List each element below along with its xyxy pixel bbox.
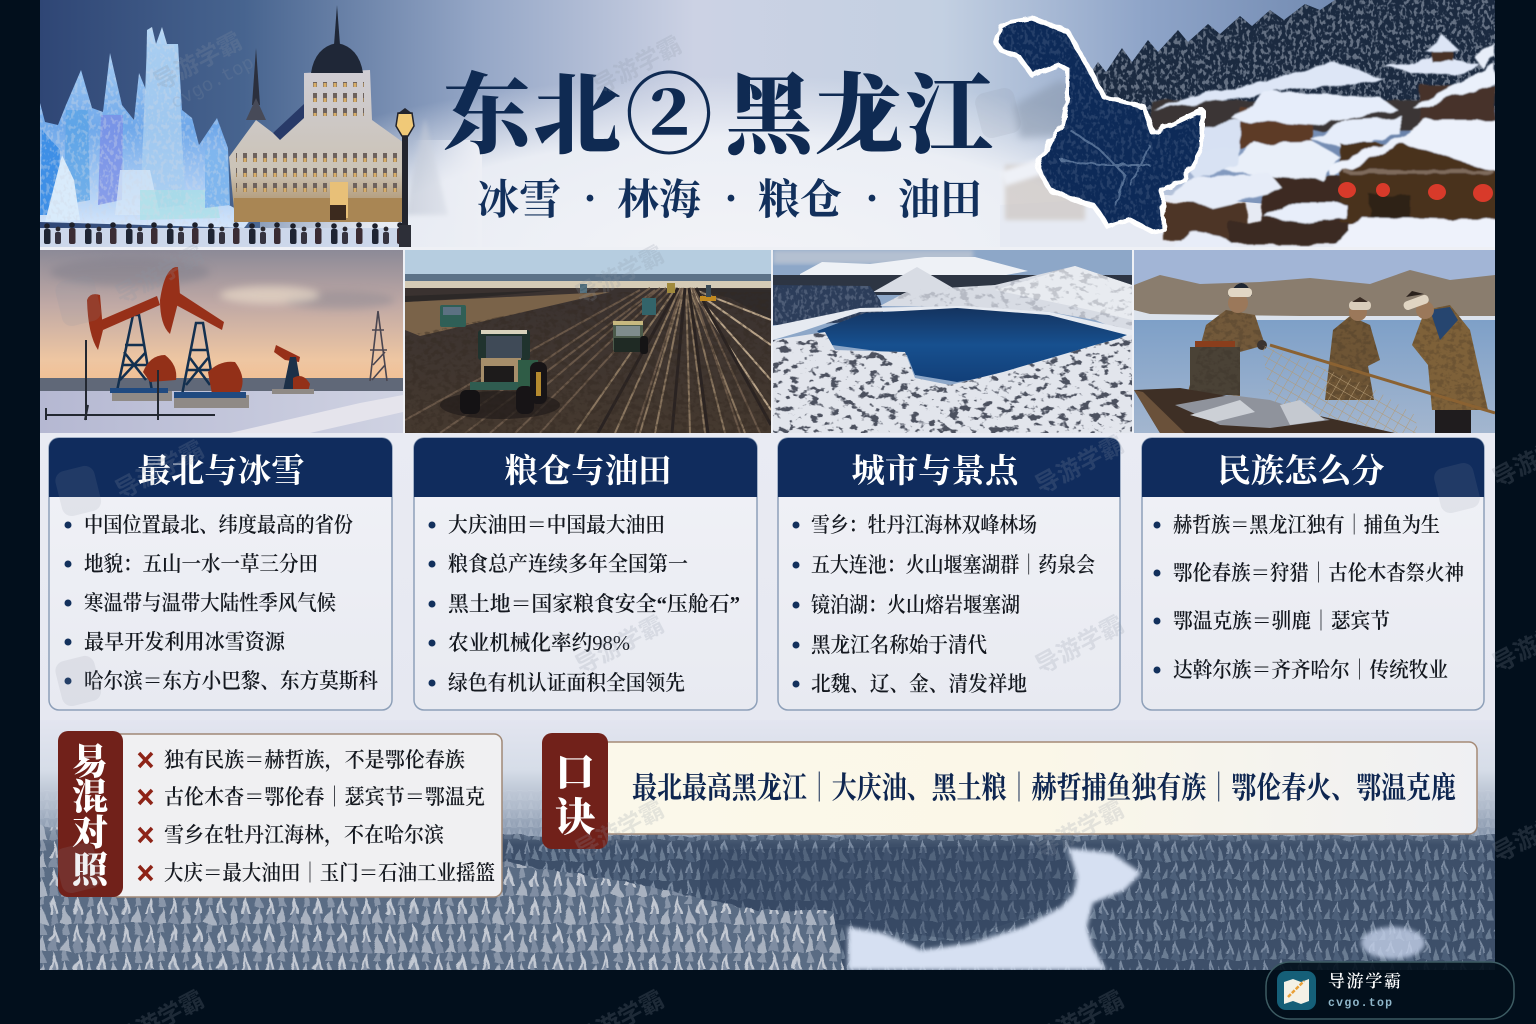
card header [778,438,1120,497]
bullet list [792,513,1095,696]
bullet list: 黑土地＝国家粮食安全“压舱石” [448,592,740,616]
card: 最北与冰雪 [49,438,392,710]
net pole [1270,345,1495,413]
subtitle: · [724,176,738,222]
bottom forest scene [30,720,1510,985]
boat with fish [1134,388,1395,433]
photo: crater lake with snow [773,250,1132,433]
tab: 易混对照 [58,731,123,897]
scene: faded bare tree [408,123,446,216]
bullet list [64,513,378,693]
cross icons [139,753,152,880]
bullet list: 粮食总产连续多年全国第一 [448,552,688,576]
foreground frosted forest [40,824,844,970]
bullet list: 绿色有机认证面积全国领先 [448,671,685,695]
watermarks: 导游学霸 [1031,796,1129,865]
icons: red lanterns [1338,182,1493,202]
frozen river [848,848,1141,970]
bullet list: 北魏、辽、金、清发祥地 [811,672,1027,696]
watermarks: 导游学霸 [589,32,686,101]
photo: Hezhe fishers on river [1134,250,1495,433]
watermarks: 导游学霸 [571,611,669,680]
bullet list: 雪乡：牡丹江海林双峰林场 [811,513,1037,537]
title: 东 [443,69,539,166]
confusion list: 独有民族＝赫哲族，不是鄂伦春族 [164,748,465,773]
subtitle: 油田 [898,177,982,224]
tab: 口诀: 口 [555,750,595,795]
fisher three [1402,291,1488,433]
watermarks: 导游学霸 [111,436,209,505]
watermarks: 导游学霸 [571,796,669,865]
bullet list: 鄂伦春族＝狩猎｜古伦木杳祭火神 [1173,561,1464,585]
subtitle: · [583,176,597,222]
subtitle: · [865,176,879,222]
bullet list [1154,513,1464,682]
bullet list [428,513,740,695]
brand badge: 导游学霸 [1328,972,1401,991]
watermarks: 导游学霸 [149,28,247,97]
bullet list: 黑龙江名称始于清代 [811,633,987,657]
bullet list: 中国位置最北、纬度最高的省份 [84,513,353,537]
card: 民族怎么分: 民族怎么分 [1218,453,1384,490]
tab: 口诀 [542,733,608,849]
tab: 口诀: 诀 [555,795,595,840]
brand badge [1266,962,1514,1019]
scene: crowd [40,222,408,244]
bullet list: 农业机械化率约98% [448,631,630,655]
confusion list [164,748,495,885]
card: 最北与冰雪: 最北与冰雪 [138,453,304,490]
card header [1142,438,1484,497]
main tractor [460,330,547,414]
bullet list: 最早开发利用冰雪资源 [84,630,286,654]
power pylon [370,311,387,381]
header banner [40,0,1495,247]
photo: tractors in black-soil field [405,250,771,433]
card header [49,438,392,497]
title: 北 [533,69,621,166]
scene: ice castle [40,27,252,228]
subtitle [477,176,982,224]
card: 城市与景点: 城市与景点 [852,453,1021,490]
fisher one [1188,283,1267,396]
bullet list: 寒温带与温带大陆性季风气候 [84,591,336,615]
watermarks: 导游学霸 [1031,611,1129,680]
card: 粮仓与油田 [414,438,757,710]
watermarks: 导游学霸 [111,241,209,310]
small tractors [440,283,716,327]
watermarks: 导游学霸 [571,241,669,310]
tab: 易混对照: 照 [72,850,111,890]
bullet list: 达斡尔族＝齐齐哈尔｜传统牧业 [1173,658,1448,682]
card: 城市与景点 [778,438,1120,710]
tab: 易混对照: 易 [72,742,108,782]
confusion list: 古伦木杳＝鄂伦春｜瑟宾节＝鄂温克 [164,785,485,809]
field furrows [405,288,771,433]
subtitle: 林海 [617,177,701,224]
scene: snow village [1000,0,1500,250]
tab: 易混对照: 混 [72,777,108,817]
title: 黑 [725,69,819,166]
card header [414,438,757,497]
confusion list: 大庆＝最大油田｜玉门＝石油工业摇篮 [164,861,495,885]
icon: street lamp [396,108,414,247]
fisher two [1325,297,1380,400]
bullet list: 地貌：五山一水一草三分田 [84,552,318,576]
panel: 易混对照 [58,731,502,897]
map: Heilongjiang silhouette [990,15,1210,235]
confusion list: 雪乡在牡丹江海林，不在哈尔滨 [164,823,445,848]
card: 粮仓与油田: 粮仓与油田 [504,453,672,490]
brand badge: cvgo.top [1328,997,1392,1010]
bullet list: 鄂温克族＝驯鹿｜瑟宾节 [1173,609,1390,633]
subtitle: 冰雪 [477,177,561,224]
bullet list: 五大连池：火山堰塞湖群｜药泉会 [811,553,1095,577]
oil pumpjacks [46,267,314,420]
tab: 易混对照: 对 [72,813,108,853]
bullet list: 哈尔滨＝东方小巴黎、东方莫斯科 [84,669,378,693]
title: 龙 [815,69,903,166]
subtitle: 粮仓 [758,177,842,224]
watermarks: 导游学霸 [1031,431,1129,500]
bullet list: 赫哲族＝黑龙江独有｜捕鱼为生 [1173,513,1440,537]
second tractor [613,321,648,354]
information band background [40,433,1495,720]
photo strip backing [40,245,1495,435]
card: 民族怎么分 [1142,438,1484,710]
fishing net [1262,345,1418,433]
title: ② [625,69,713,166]
scene: european building [229,5,404,222]
panel: 口诀 [542,733,1477,849]
watermarks: cvgo.top [167,52,258,114]
bullet list: 镜泊湖：火山熔岩堰塞湖 [811,593,1020,617]
icon: folded map [1277,971,1316,1010]
bullet list: 大庆油田＝中国最大油田 [448,513,665,537]
title: 江 [905,69,993,166]
photo: oil field at sunset [40,250,403,433]
